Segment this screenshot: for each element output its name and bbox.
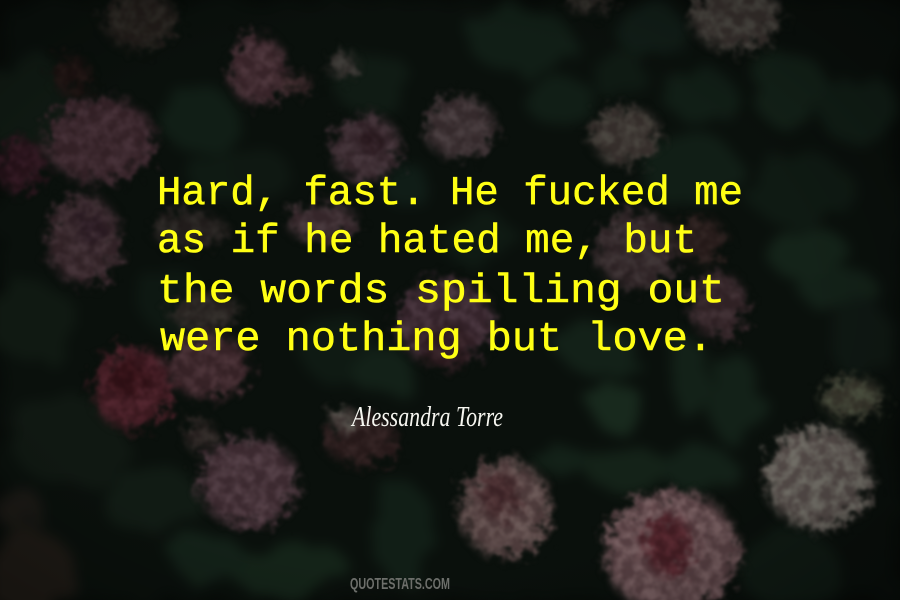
watermark: QUOTESTATS.COM xyxy=(350,576,450,593)
quote text: Hard, fast. He fucked me xyxy=(157,171,743,217)
quote text: the words spilling out xyxy=(157,269,725,315)
quote text: were nothing but love. xyxy=(160,317,713,363)
quote text: as if he hated me, but xyxy=(157,219,697,265)
author signature: Alessandra Torre xyxy=(350,402,503,433)
quote text xyxy=(157,171,743,363)
